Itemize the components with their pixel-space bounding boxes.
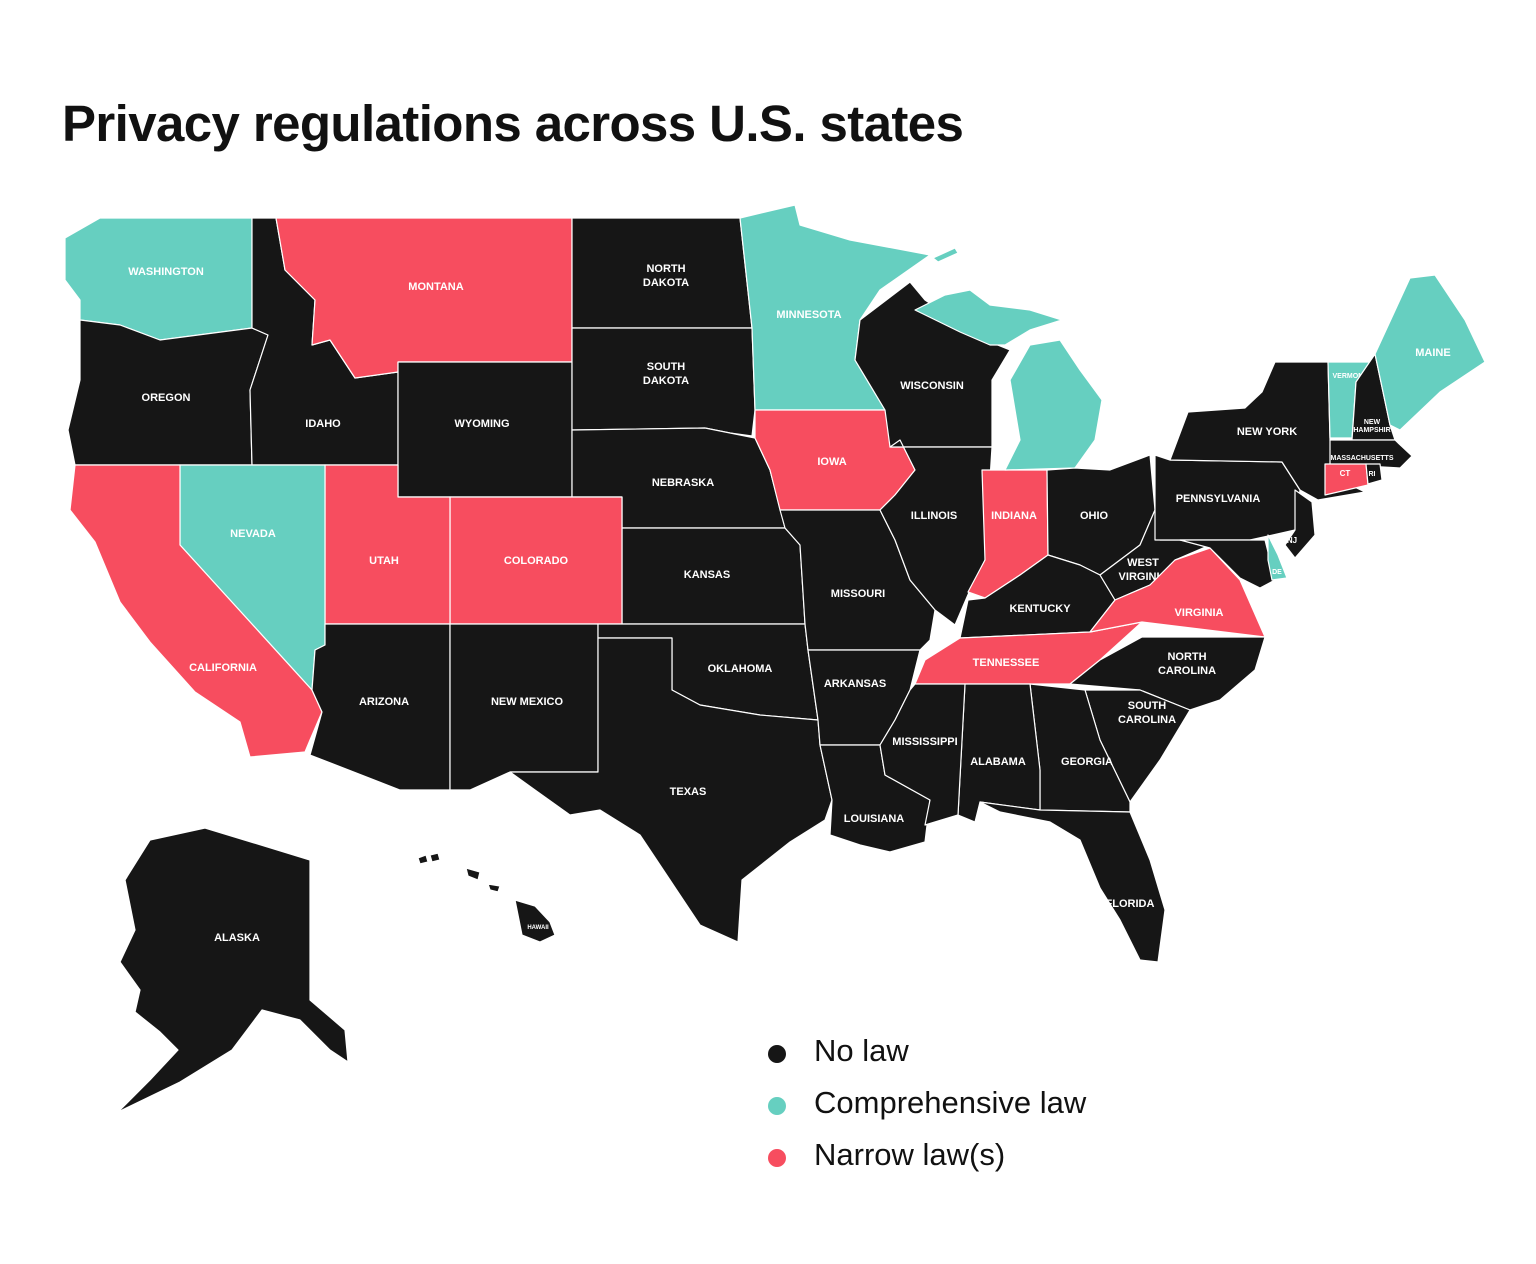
state: New Hampshire: HAMPSHIR (1353, 427, 1391, 434)
state: North Dakota (572, 218, 752, 328)
state: Louisiana (820, 745, 930, 852)
state: Maine: MAINE (1415, 347, 1451, 359)
state: Montana: MONTANA (408, 281, 464, 293)
state: Utah (325, 465, 450, 624)
state: New Jersey (1285, 490, 1315, 558)
state: South Dakota: SOUTH (647, 361, 685, 373)
state: Wisconsin: WISCONSIN (900, 380, 964, 392)
state: Pennsylvania: PENNSYLVANIA (1176, 493, 1260, 505)
state: Colorado: COLORADO (504, 555, 569, 567)
state: Mississippi: MISSISSIPPI (892, 736, 958, 748)
state: Arkansas: ARKANSAS (824, 678, 886, 690)
state: Hawaii (418, 853, 555, 942)
state: South Carolina: SOUTH (1128, 700, 1166, 712)
state: Idaho: IDAHO (305, 418, 341, 430)
state: Vermont (1328, 362, 1375, 438)
state: Indiana (968, 470, 1048, 598)
state: Massachusetts (1330, 440, 1412, 468)
state: Minnesota (740, 205, 930, 410)
state: Ohio: OHIO (1080, 510, 1108, 522)
state: Washington: WASHINGTON (128, 266, 204, 278)
state: Texas (510, 638, 832, 942)
state: Kansas: KANSAS (684, 569, 730, 581)
state: New Mexico (450, 624, 598, 790)
state: Missouri: MISSOURI (831, 588, 885, 600)
state: Iowa (755, 410, 915, 510)
legend: comprehensive law (768, 1085, 1086, 1120)
state: Wyoming (398, 362, 572, 497)
state: North Dakota: DAKOTA (643, 277, 689, 289)
state: Colorado (450, 497, 622, 624)
state: New Hampshire: NEW (1364, 419, 1381, 426)
state: California (70, 465, 322, 757)
state: Nevada: NEVADA (230, 528, 276, 540)
state: Utah: UTAH (369, 555, 399, 567)
state: Wyoming: WYOMING (454, 418, 510, 430)
state: Illinois: ILLINOIS (911, 510, 957, 522)
state: Nebraska: NEBRASKA (652, 477, 714, 489)
state: South Dakota (572, 328, 755, 436)
state: Virginia (1090, 548, 1265, 637)
state: Arkansas (808, 650, 920, 745)
state: North Carolina: CAROLINA (1158, 665, 1216, 677)
state: Connecticut: CT (1340, 469, 1350, 478)
state: Kansas (622, 528, 805, 624)
state: Illinois (880, 440, 992, 625)
state: Rhode Island (1366, 464, 1382, 484)
state: Arizona: ARIZONA (359, 696, 409, 708)
legend: narrow laws (768, 1137, 1005, 1172)
legend: Narrow law(s) (814, 1137, 1005, 1172)
state: Virginia: VIRGINIA (1175, 607, 1223, 619)
state: California: CALIFORNIA (189, 662, 257, 674)
state: Vermont: VERMONT (1332, 373, 1368, 380)
state: New Hampshire (1352, 354, 1395, 440)
state: Missouri (780, 510, 935, 650)
state: Maryland (1180, 540, 1275, 588)
state: Delaware: DE (1272, 569, 1282, 576)
state: Mississippi (880, 684, 965, 825)
legend: No law (814, 1033, 909, 1068)
state: Connecticut (1325, 464, 1368, 495)
state: New York (1170, 362, 1365, 500)
state: Michigan (915, 248, 1102, 470)
state: Alabama (958, 684, 1040, 822)
state: Tennessee: TENNESSEE (973, 657, 1039, 669)
state: Oklahoma: OKLAHOMA (708, 663, 772, 675)
state: Idaho (250, 218, 398, 465)
state: Nevada (180, 465, 325, 690)
legend (768, 1033, 1086, 1172)
state: Georgia (1030, 684, 1130, 812)
state: Ohio (1047, 455, 1155, 575)
state: Oklahoma (598, 624, 818, 720)
state: West Virginia (1100, 510, 1210, 600)
state: Kentucky (960, 555, 1115, 638)
state: Alaska: ALASKA (214, 932, 260, 944)
state: Minnesota: MINNESOTA (776, 309, 842, 321)
state: North Carolina (1070, 637, 1265, 710)
state: Texas: TEXAS (670, 786, 706, 798)
state: Alabama: ALABAMA (970, 756, 1026, 768)
state: Iowa: IOWA (817, 456, 847, 468)
state: Maine (1375, 275, 1485, 430)
state: South Carolina: CAROLINA (1118, 714, 1176, 726)
state: Wisconsin (855, 282, 1010, 447)
state: Oregon: OREGON (142, 392, 190, 404)
legend: Comprehensive law (814, 1085, 1086, 1120)
state: Nebraska (572, 428, 785, 528)
state: Oregon (68, 320, 268, 465)
state: Pennsylvania (1155, 455, 1300, 540)
state: New Jersey: NJ (1287, 536, 1297, 545)
state: Delaware (1268, 535, 1287, 580)
state: Kentucky: KENTUCKY (1009, 603, 1071, 615)
state: Tennessee (915, 622, 1142, 684)
state: West Virginia: VIRGINIA (1119, 571, 1167, 583)
state: New York: NEW YORK (1237, 426, 1297, 438)
state: Indiana: INDIANA (991, 510, 1037, 522)
state: Hawaii: HAWAII (527, 925, 549, 931)
state: West Virginia: WEST (1127, 557, 1159, 569)
state: Washington (65, 218, 252, 340)
state: South Carolina (1085, 690, 1190, 802)
state: Louisiana: LOUISIANA (844, 813, 904, 825)
state: Georgia: GEORGIA (1061, 756, 1113, 768)
state: North Dakota: NORTH (646, 263, 686, 275)
state: New Mexico: NEW MEXICO (491, 696, 563, 708)
state: North Carolina: NORTH (1167, 651, 1207, 663)
state: Rhode Island: RI (1368, 471, 1376, 478)
title: Privacy regulations across U.S. states (62, 95, 963, 152)
legend: no law (768, 1033, 909, 1068)
state: Montana (276, 218, 572, 378)
state: Massachusetts: MASSACHUSETTS (1330, 455, 1394, 462)
state: Florida: FLORIDA (1106, 898, 1154, 910)
state: Alaska (118, 828, 348, 1112)
state: Arizona (310, 624, 450, 790)
state: South Dakota: DAKOTA (643, 375, 689, 387)
state: Florida (980, 802, 1165, 962)
